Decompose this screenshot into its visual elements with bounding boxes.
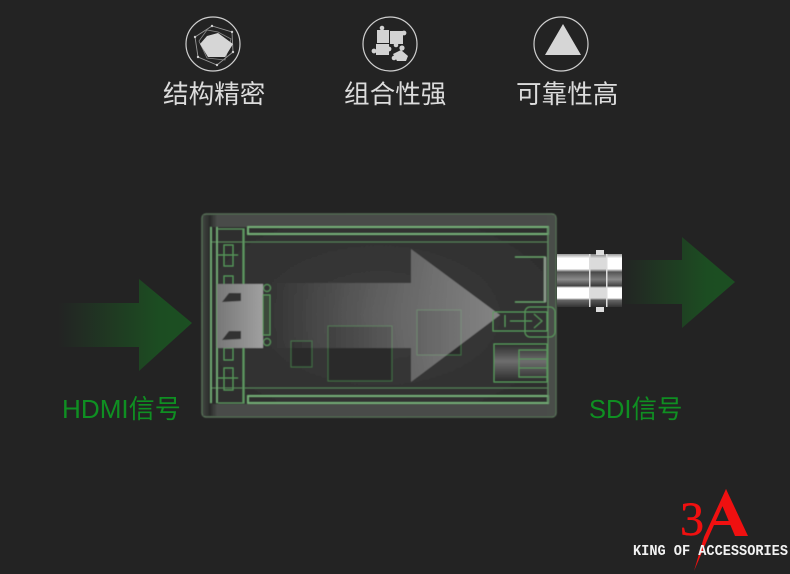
HDMI port: [217, 284, 270, 348]
label: SDI signal: SDI信号: [589, 396, 683, 424]
BNC bracket: [515, 257, 545, 302]
device: transparent converter: [202, 214, 556, 417]
logo mark: [680, 489, 748, 571]
feature: precise structure: [163, 17, 265, 109]
logo: 3A King of Accessories: [633, 489, 788, 571]
label: 可靠性高: 可靠性高: [516, 80, 618, 109]
icon: triangle in circle: [534, 17, 588, 71]
BNC connector: [557, 250, 622, 312]
chip outlines: [291, 310, 461, 381]
label: 组合性强: 组合性强: [344, 80, 446, 109]
small circuit parts: [493, 307, 555, 337]
icon: puzzle pieces in circle: [363, 17, 417, 71]
arrow: SDI output: [620, 237, 735, 328]
label: 结构精密: 结构精密: [163, 80, 265, 109]
arrow: HDMI input: [58, 279, 192, 371]
feature: high reliability: [516, 17, 618, 109]
icon: polyhedron in circle: [186, 17, 240, 71]
feature: strong combination: [344, 17, 446, 109]
device body: [202, 214, 556, 417]
internal frame lines: [211, 227, 548, 403]
arrow: centre signal flow: [270, 249, 500, 382]
label: HDMI signal: HDMI信号: [62, 394, 181, 424]
logo mark: 3: [680, 493, 704, 546]
component block: [494, 344, 547, 382]
